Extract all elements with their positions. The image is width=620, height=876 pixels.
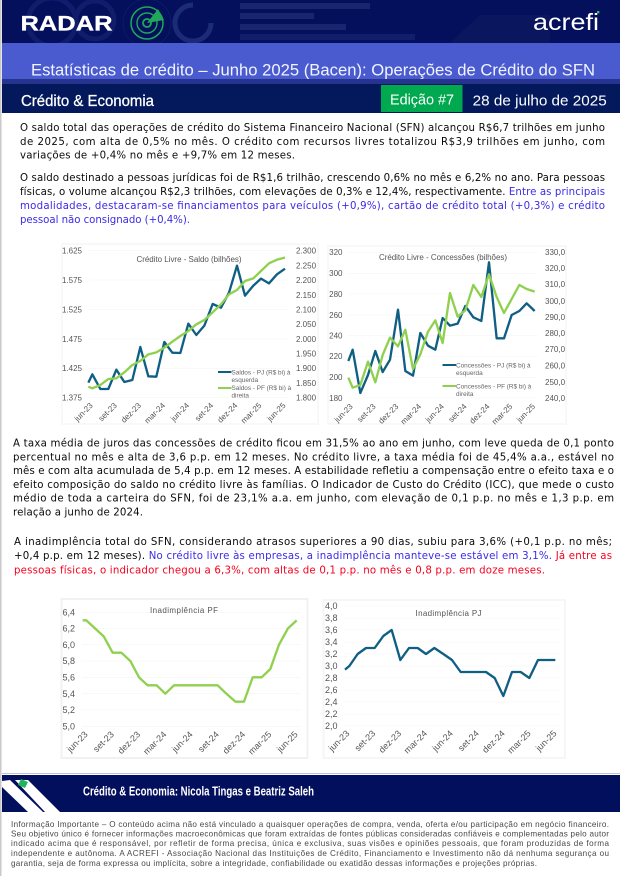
line chart: Crédito Livre - Saldo: 2.000	[296, 335, 317, 344]
line chart: Inadimplência PF: dez-24	[221, 729, 247, 756]
line chart: Crédito Livre - Concessões: 310,0	[545, 280, 566, 289]
disclaimer: Seu objetivo único é fornecer informações macroeconômicas que foram extraídas de fontes públicas consideradas confiáveis e complementadas pelo autor	[11, 830, 609, 838]
line chart: Inadimplência PF: Inadimplência PF	[150, 606, 218, 615]
series: Saldos PJ	[88, 266, 285, 389]
paragraph: taxa média de juros: percentual no mês e alta de 3,6 p.p. em 12 meses. No crédito livre, a taxa média foi de 45,4% a.a., estável no	[13, 452, 614, 464]
line chart: Crédito Livre - Saldo: 1.950	[296, 350, 317, 358]
line chart: Crédito Livre - Saldo: mar-25	[239, 401, 264, 425]
line chart: Crédito Livre - Concessões: set-23	[355, 402, 378, 424]
line chart: Crédito Livre - Saldo: jun-25	[265, 401, 288, 424]
line chart: Inadimplência PF	[62, 599, 308, 758]
disclaimer: independente e autônoma. A ACREFI - Associação Nacional das Instituições de Crédito, Financiamento e Investimento não dá nenhuma segurança ou	[11, 849, 609, 858]
paragraph: pessoas jurídicas e físicas: pessoal não consignado (+0,4%).	[20, 215, 190, 226]
line chart: Crédito Livre - Saldo: 1.425	[62, 364, 83, 373]
line chart: Inadimplência PJ: set-24	[456, 728, 481, 753]
line chart: Crédito Livre - Concessões: mar-25	[490, 402, 515, 426]
disclaimer	[11, 820, 609, 868]
line chart: Crédito Livre - Saldo: 1.625	[62, 246, 83, 256]
line chart: Inadimplência PF: dez-23	[116, 729, 142, 756]
legend: Saldos - PJ (R$ bi) à	[232, 370, 291, 376]
line chart: Crédito Livre - Saldo: set-23	[97, 401, 119, 423]
legend: direita	[456, 391, 474, 398]
line chart: Crédito Livre - Concessões: 240,0	[545, 394, 566, 403]
line chart: Inadimplência PJ: jun-24	[430, 728, 455, 754]
line chart: Inadimplência PJ: 3,0	[325, 661, 338, 671]
legend: esquerda	[232, 377, 259, 384]
legend: Saldos - PF (R$ bi) à	[232, 385, 292, 392]
line chart: Inadimplência PJ: mar-25	[505, 728, 533, 756]
line chart: Crédito Livre - Concessões: 200	[329, 373, 343, 382]
line chart: Inadimplência PJ: 3,8	[325, 613, 338, 623]
paragraph: saldo total: de 2025, com alta de 0,5% no mês. O crédito com recursos livres totalizou R$3,9 trilhões em junho, com	[20, 136, 605, 148]
paragraph: taxa média de juros	[13, 438, 614, 518]
line chart: Crédito Livre - Saldo: 2.200	[296, 276, 317, 285]
line chart: Crédito Livre - Saldo: 1.375	[62, 394, 83, 402]
line chart: Crédito Livre - Saldo: 2.300	[296, 246, 317, 256]
series: Concessões PF	[348, 274, 535, 388]
disclaimer: Informação Importante – O conteúdo acima não está vinculado a quaisquer operações de compra, venda, oferta e/ou participação em negócio financeiro.	[11, 820, 609, 829]
legend	[218, 370, 292, 400]
line chart: Inadimplência PF: mar-24	[141, 729, 168, 757]
line chart: Crédito Livre - Saldo: set-24	[193, 401, 216, 423]
line chart: Crédito Livre - Concessões: 280,0	[545, 329, 566, 338]
paragraph: inadimplência: A inadimplência total do SFN, considerando atrasos superiores a 90 dias, subiu para 3,6% (+0,1 p.p. no mês;	[14, 536, 612, 548]
line chart: Crédito Livre - Concessões: 240	[329, 332, 343, 340]
acrefi logo: acrefi	[533, 9, 599, 35]
paragraph: pessoas jurídicas e físicas: modalidades, destacaram-se financiamentos para veículos (+0,9%), cartão de crédito total (+0,3%) e crédito	[20, 200, 605, 212]
footer logo	[2, 779, 60, 812]
line chart: Crédito Livre - Saldo: 2.100	[296, 306, 317, 314]
paragraph: saldo total: O saldo total das operações de crédito do Sistema Financeiro Nacional (SFN) alcançou R$6,7 trilhões em junho	[20, 122, 605, 134]
paragraph: taxa média de juros: A taxa média de juros das concessões de crédito ficou em 31,5% ao ano em junho, com leve queda de 0,1 ponto	[13, 438, 614, 450]
line chart: Inadimplência PJ: set-23	[353, 728, 377, 753]
disclaimer: indicado acima que é responsável, por refletir de forma precisa, única e exclusiva, suas visões e opiniões pessoais, que foram produzidas de forma	[11, 839, 609, 848]
line chart: Crédito Livre - Concessões	[328, 246, 566, 426]
title band	[2, 43, 620, 84]
legend: Concessões - PF (R$ bi) à	[456, 384, 532, 390]
line chart: Inadimplência PJ: jun-25	[533, 728, 559, 754]
line chart: Inadimplência PF: jun-24	[169, 729, 195, 755]
line chart: Inadimplência PF: 5,4	[62, 689, 75, 699]
line chart: Crédito Livre - Concessões: jun-23	[332, 402, 355, 425]
line chart: Inadimplência PF: 5,6	[62, 672, 75, 682]
paragraph: inadimplência	[14, 536, 612, 576]
line chart: Crédito Livre - Concessões: 250,0	[545, 378, 566, 387]
authors: Crédito & Economia: Nicola Tingas e Beatriz Saleh	[83, 784, 314, 798]
line chart: Crédito Livre - Saldo: 2.050	[296, 320, 317, 329]
line chart: Crédito Livre - Saldo: jun-24	[168, 401, 191, 424]
legend: esquerda	[456, 370, 483, 377]
line chart: Inadimplência PJ: 3,2	[325, 649, 338, 659]
paragraph: inadimplência: +0,4 p.p. em 12 meses). No crédito livre às empresas, a inadimplência manteve-se estável em 3,1%. Já entre as	[14, 550, 612, 562]
paragraph: pessoas jurídicas e físicas: físicas, o volume alcançou R$2,3 trilhões, com elevações de 0,3% e 12,4%, respectivamente. Entre as principais	[20, 186, 605, 198]
paragraph: pessoas jurídicas e físicas: O saldo destinado a pessoas jurídicas foi de R$1,6 trilhão, crescendo 0,6% no mês e 6,2% no ano. Para pessoas	[20, 172, 605, 184]
line chart: Inadimplência PF: set-24	[196, 729, 221, 754]
line chart: Crédito Livre - Concessões: 220	[329, 352, 343, 361]
series: Concessões PJ	[348, 262, 535, 393]
line chart: Inadimplência PJ: 2,0	[325, 721, 338, 731]
line chart: Inadimplência PJ: mar-24	[402, 728, 429, 756]
disclaimer: garantia, seja de forma expressa ou implícita, sobre a integridade, confiabilidade ou exatidão dessas informações e projeções próprias.	[11, 859, 537, 868]
line chart: Inadimplência PJ: 2,2	[325, 709, 338, 719]
line chart: Crédito Livre - Concessões: 280	[329, 290, 343, 299]
icon: radar	[131, 7, 164, 39]
line chart: Inadimplência PF: jun-23	[64, 729, 90, 755]
line chart: Crédito Livre - Saldo: 2.150	[296, 291, 317, 300]
legend: direita	[232, 392, 249, 400]
line chart: Crédito Livre - Concessões: 260,0	[545, 362, 566, 370]
section bar	[2, 84, 620, 113]
line chart: Crédito Livre - Saldo: 1.525	[62, 306, 83, 314]
line chart: Crédito Livre - Saldo: 1.900	[296, 364, 317, 373]
legend: Concessões - PJ (R$ bi) à	[456, 362, 531, 370]
section bar: Crédito & Economia	[21, 93, 154, 110]
line chart: Inadimplência PJ: 3,4	[325, 637, 338, 647]
line chart: Crédito Livre - Saldo: 2.250	[296, 262, 317, 270]
line chart: Inadimplência PF: 5,8	[62, 656, 75, 666]
line chart: Inadimplência PJ: 2,4	[325, 697, 338, 707]
line chart: Inadimplência PJ: dez-23	[377, 728, 403, 755]
line chart: Crédito Livre - Concessões: 320,0	[545, 264, 566, 273]
line chart: Crédito Livre - Saldo: dez-23	[119, 401, 143, 425]
line chart: Crédito Livre - Saldo	[62, 244, 318, 425]
line chart: Crédito Livre - Saldo: 1.475	[62, 335, 83, 344]
line chart: Crédito Livre - Concessões: 270,0	[545, 345, 566, 354]
line chart: Crédito Livre - Concessões: dez-24	[468, 402, 492, 426]
footer band	[2, 773, 620, 812]
line chart: Crédito Livre - Saldo: 1.850	[296, 379, 317, 388]
line chart: Inadimplência PF: 6,2	[62, 624, 75, 634]
paragraph: inadimplência: pessoas físicas, o indicador chegou a 6,3%, com altas de 0,1 p.p. no mês e 0,8 p.p. em doze meses.	[14, 564, 545, 576]
paragraph: pessoas jurídicas e físicas	[20, 172, 605, 226]
line chart: Inadimplência PF: jun-25	[274, 729, 300, 755]
line chart: Crédito Livre - Concessões: 180	[329, 394, 343, 403]
line chart: Inadimplência PJ: Inadimplência PJ	[416, 609, 482, 618]
line chart: Crédito Livre - Concessões: 330,0	[545, 248, 566, 257]
line chart: Crédito Livre - Saldo: 1.800	[296, 394, 317, 402]
line chart: Crédito Livre - Concessões: 260	[329, 311, 343, 320]
line chart: Crédito Livre - Concessões: set-24	[447, 402, 469, 424]
paragraph: saldo total	[20, 122, 605, 162]
line chart: Inadimplência PJ: 2,8	[325, 673, 338, 683]
paragraph: taxa média de juros: relação a junho de 2024.	[13, 508, 143, 518]
series: Saldos PF	[88, 258, 285, 388]
date: 28 de julho de 2025	[473, 92, 607, 110]
line chart: Crédito Livre - Concessões: Crédito Livre - Concessões (bilhões)	[379, 253, 507, 262]
line chart: Crédito Livre - Saldo: Crédito Livre - Saldo (bilhões)	[136, 255, 242, 264]
line chart: Inadimplência PJ	[324, 600, 565, 758]
edition badge	[381, 85, 462, 112]
paragraph: taxa média de juros: médio de toda a carteira do SFN, foi de 23,1% a.a. em junho, com elevação de 0,1 p.p. no mês e 1,3 p.p. em	[13, 492, 614, 504]
line chart: Inadimplência PJ: jun-23	[326, 728, 351, 754]
title band: Estatísticas de crédito – Junho 2025 (Bacen): Operações de Crédito do SFN	[31, 60, 595, 80]
line chart: Crédito Livre - Concessões: mar-24	[399, 402, 424, 426]
paragraph: taxa média de juros: efeito composição do saldo no crédito livre às famílias. O Indicador de Custo do Crédito (ICC), que mede o custo	[13, 479, 614, 491]
header banner	[2, 0, 620, 47]
line chart: Inadimplência PJ: 3,6	[325, 625, 338, 635]
line chart: Inadimplência PF: set-23	[91, 729, 116, 754]
line chart: Crédito Livre - Saldo: 1.575	[62, 276, 83, 285]
line chart: Inadimplência PF: 5,0	[62, 722, 75, 732]
line chart: Crédito Livre - Concessões: jun-25	[514, 402, 537, 425]
line chart: Crédito Livre - Concessões: jun-24	[423, 402, 446, 425]
line chart: Inadimplência PJ: dez-24	[480, 728, 507, 755]
series: Inadimplência PF	[83, 620, 297, 702]
series: Inadimplência PJ	[345, 630, 555, 696]
paragraph: saldo total: variações de +0,4% no mês e +9,7% em 12 meses.	[20, 150, 295, 162]
line chart: Inadimplência PF: 6,4	[62, 608, 75, 618]
line chart: Inadimplência PJ: 2,6	[325, 685, 338, 695]
line chart: Crédito Livre - Concessões: 300	[329, 269, 343, 278]
line chart: Crédito Livre - Saldo: jun-23	[72, 401, 95, 424]
edition badge: Edição #7	[390, 92, 454, 108]
line chart: Inadimplência PJ: 4,0	[325, 601, 338, 611]
line chart: Crédito Livre - Concessões: 300,0	[545, 297, 566, 306]
line chart: Crédito Livre - Concessões: dez-23	[377, 402, 401, 426]
line chart: Inadimplência PF: 5,2	[62, 705, 75, 715]
paragraph: taxa média de juros: mês e com alta acumulada de 5,4 p.p. em 12 meses. A estabilidade refletiu a compensação entre o efeito taxa e o	[13, 465, 614, 477]
legend	[442, 362, 532, 398]
line chart: Crédito Livre - Concessões: 290,0	[545, 313, 566, 322]
line chart: Crédito Livre - Saldo: mar-24	[143, 401, 167, 425]
line chart: Inadimplência PF: 6,0	[62, 640, 75, 650]
line chart: Crédito Livre - Concessões: 320	[329, 248, 343, 257]
RADAR wordmark: RADAR	[20, 12, 112, 36]
line chart: Inadimplência PF: mar-25	[246, 729, 273, 757]
line chart: Crédito Livre - Saldo: dez-24	[216, 401, 240, 425]
